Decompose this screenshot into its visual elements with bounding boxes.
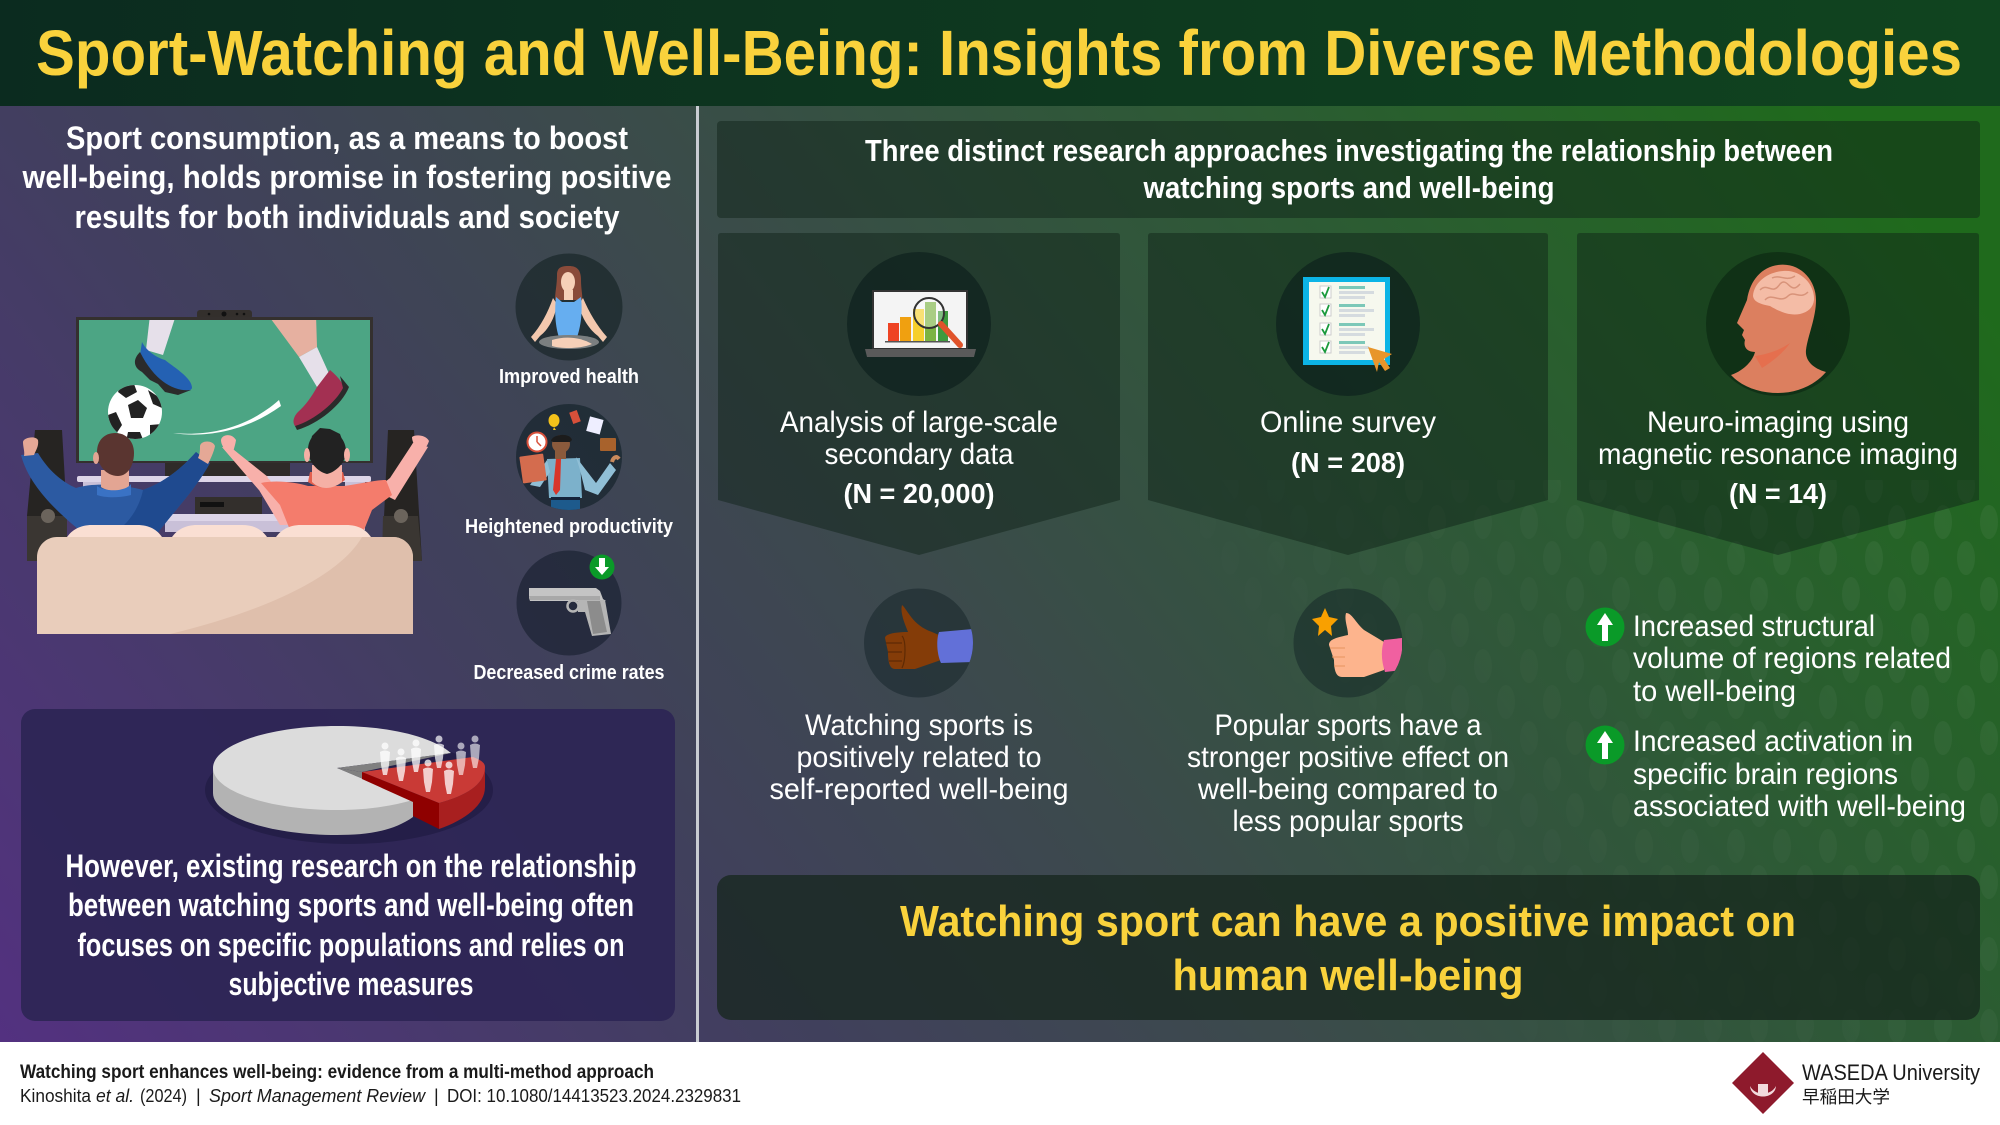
text xyxy=(66,848,636,1002)
label: Online survey xyxy=(1260,406,1436,439)
label xyxy=(780,406,1058,509)
illustration: fans watching football on TV xyxy=(21,310,429,634)
chart: pie with highlighted subgroup xyxy=(205,726,493,844)
citation: Watching sport enhances well-being: evidence from a multi-method approach xyxy=(20,1062,654,1083)
text: between watching sports and well-being often xyxy=(68,887,634,923)
icon: meditating woman xyxy=(516,254,622,360)
right fan xyxy=(221,428,429,530)
conclusion panel: human well-being xyxy=(1172,951,1524,1000)
panel: limitations of existing research xyxy=(21,709,675,1021)
icon: thumbs up, dark hand xyxy=(864,588,973,698)
text: subjective measures xyxy=(228,966,474,1002)
icon: handgun with down arrow xyxy=(516,550,622,656)
conclusion panel: Watching sport can have a positive impact on xyxy=(900,897,1796,946)
text: focuses on specific populations and relies on xyxy=(78,927,624,963)
text: well-being compared to xyxy=(1197,773,1498,806)
football xyxy=(108,384,162,442)
text: less popular sports xyxy=(1232,805,1464,838)
sofa xyxy=(37,525,413,634)
logo: Waseda University xyxy=(1732,1052,1980,1114)
finding: increased activation xyxy=(1586,725,1966,823)
icon: laptop with chart xyxy=(847,252,991,396)
benefit: improved health xyxy=(499,254,639,388)
citation: Kinoshita xyxy=(20,1086,92,1106)
text: associated with well-being xyxy=(1633,790,1966,823)
intro text: well-being, holds promise in fostering positive xyxy=(22,159,671,195)
label: Decreased crime rates xyxy=(474,662,664,684)
people icons xyxy=(380,736,480,794)
icon: thumbs up with star xyxy=(1294,588,1402,698)
icon: green up arrow xyxy=(1586,726,1624,764)
divider xyxy=(696,106,699,1042)
finding: increased structural volume xyxy=(1586,608,1951,708)
citation: | xyxy=(434,1086,439,1106)
text: However, existing research on the relationship xyxy=(66,848,636,884)
heading panel: three research approaches xyxy=(717,121,1980,218)
intro text: results for both individuals and society xyxy=(74,199,620,235)
citation: DOI: 10.1080/14413523.2024.2329831 xyxy=(447,1086,741,1106)
text xyxy=(1633,725,1966,823)
icon: survey checklist with cursor xyxy=(1276,252,1420,396)
citation: et al. xyxy=(96,1086,134,1106)
panel: neuro-imaging xyxy=(1577,233,1979,555)
citation: Sport Management Review xyxy=(209,1086,426,1106)
citation: (2024) xyxy=(140,1086,187,1106)
heading panel: three research approaches: watching sports and well-being xyxy=(1143,170,1554,205)
text: Increased structural xyxy=(1633,610,1875,643)
speakers xyxy=(27,430,422,561)
benefit: decreased crime rates xyxy=(474,550,664,684)
label: Analysis of large-scale xyxy=(780,406,1058,439)
label: (N = 208) xyxy=(1291,447,1405,478)
label: secondary data xyxy=(824,438,1014,471)
left fan xyxy=(21,433,215,535)
label: (N = 14) xyxy=(1729,478,1827,509)
label: Improved health xyxy=(499,366,639,388)
panel: secondary data analysis xyxy=(718,233,1120,555)
conclusion panel xyxy=(717,875,1980,1020)
benefit: heightened productivity xyxy=(465,404,674,538)
icon: head with brain xyxy=(1706,252,1850,396)
swoosh xyxy=(173,400,281,435)
text xyxy=(1633,610,1951,708)
camera xyxy=(197,310,252,319)
citation: | xyxy=(196,1086,201,1106)
television xyxy=(76,315,373,463)
footer xyxy=(0,1042,2000,1125)
text: self-reported well-being xyxy=(770,773,1068,806)
text: to well-being xyxy=(1633,675,1796,708)
text: Watching sports is xyxy=(805,709,1033,742)
text xyxy=(770,709,1068,806)
text xyxy=(1187,709,1509,838)
label: Neuro-imaging using xyxy=(1647,406,1909,439)
text: positively related to xyxy=(796,741,1042,774)
icon: green up arrow xyxy=(1586,608,1624,646)
tv stand xyxy=(77,463,371,532)
text: specific brain regions xyxy=(1633,758,1898,791)
text: Increased activation in xyxy=(1633,725,1913,758)
icon: businessman juggling tasks xyxy=(516,404,622,512)
label: (N = 20,000) xyxy=(844,478,994,509)
text: volume of regions related xyxy=(1633,642,1951,675)
text: stronger positive effect on xyxy=(1187,741,1509,774)
label xyxy=(1598,406,1958,509)
intro text: Sport consumption, as a means to boost xyxy=(66,120,628,156)
finding: watching sports xyxy=(770,588,1068,806)
logo: Waseda University: 早稲田大学 xyxy=(1802,1087,1890,1107)
citation xyxy=(20,1062,741,1106)
logo: Waseda University: WASEDA University xyxy=(1802,1060,1980,1085)
heading panel: three research approaches: Three distinct research approaches investigating the relationship between xyxy=(865,133,1833,168)
finding: popular sports xyxy=(1187,588,1509,838)
label xyxy=(1260,406,1436,478)
intro text xyxy=(22,120,671,235)
label: magnetic resonance imaging xyxy=(1598,438,1958,471)
label: Heightened productivity xyxy=(465,516,674,538)
header band with title xyxy=(0,0,2000,106)
panel: online survey xyxy=(1148,233,1548,555)
text: Popular sports have a xyxy=(1214,709,1482,742)
